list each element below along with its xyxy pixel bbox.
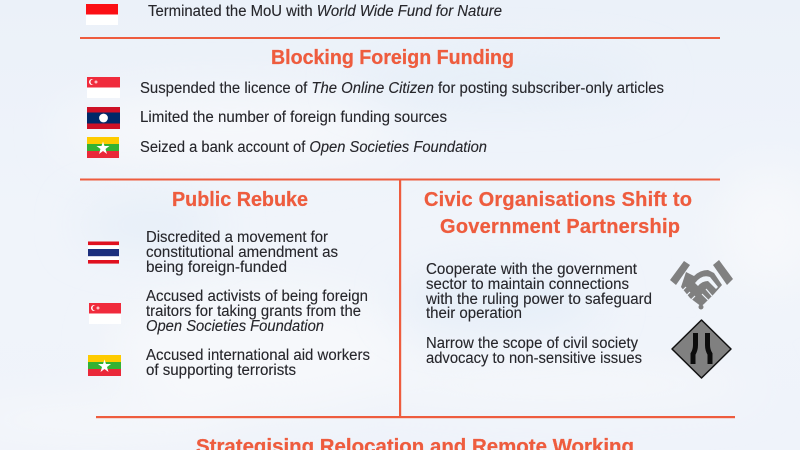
text: cooperate: with the ruling power to safeguard: [425, 291, 652, 308]
text: cooperate: [425, 261, 652, 322]
text: limited foreign funding: Limited the number of foreign funding sources: [140, 109, 447, 126]
text: accused aid workers: Accused international aid workers: [146, 347, 370, 364]
panel: public rebuke: [88, 189, 370, 379]
heading: civic organisations shift: Government Partnership: [440, 216, 680, 238]
heading: public rebuke: Public Rebuke: [172, 189, 308, 211]
text: discredited: constitutional amendment as: [146, 244, 338, 261]
text: accused activists: Accused activists of being foreign: [146, 288, 368, 305]
heading: civic organisations shift: Civic Organisations Shift to: [424, 189, 692, 211]
flag: Indonesia: [86, 4, 118, 25]
text: narrow scope: [426, 335, 642, 367]
top row: Indonesia: [86, 3, 502, 25]
heading: blocking foreign funding: Blocking Foreign Funding: [271, 47, 514, 69]
text: accused activists: [146, 288, 368, 335]
text: accused activists: traitors for taking grants from the: [146, 303, 361, 320]
flag: Myanmar: [87, 137, 119, 158]
text: cooperate: sector to maintain connections: [426, 276, 629, 293]
flag: Laos: [87, 107, 120, 129]
text: terminated MoU: Terminated the MoU with World Wide Fund for Nature: [148, 3, 502, 20]
icon: handshake: [670, 260, 733, 310]
panel: civic organisations shift: [424, 189, 733, 378]
text: online citizen: Suspended the licence of The Online Citizen for posting subscriber-only articles: [140, 80, 664, 97]
text: discredited: being foreign-funded: [146, 259, 287, 276]
text: cooperate: their operation: [426, 305, 522, 322]
flag: Singapore: [87, 77, 120, 98]
heading: civic organisations shift: [424, 189, 692, 238]
text: accused activists: Open Societies Foundation: [146, 318, 324, 335]
text: accused aid workers: of supporting terrorists: [146, 362, 296, 379]
text: accused aid workers: [146, 347, 370, 379]
text: discredited: [146, 229, 338, 276]
text: narrow scope: Narrow the scope of civil society: [426, 335, 638, 352]
flag: Myanmar: [88, 355, 121, 376]
divider lines: [80, 37, 735, 418]
text: discredited: Discredited a movement for: [146, 229, 328, 246]
flag: Singapore: [89, 303, 121, 324]
text: narrow scope: advocacy to non-sensitive issues: [426, 350, 642, 367]
icon: road narrows sign: [672, 320, 731, 378]
text: seized bank account: Seized a bank account of Open Societies Foundation: [140, 139, 487, 156]
text: cooperate: Cooperate with the government: [426, 261, 638, 278]
panel: blocking foreign funding: [87, 47, 664, 158]
flag: Thailand: [88, 242, 119, 264]
